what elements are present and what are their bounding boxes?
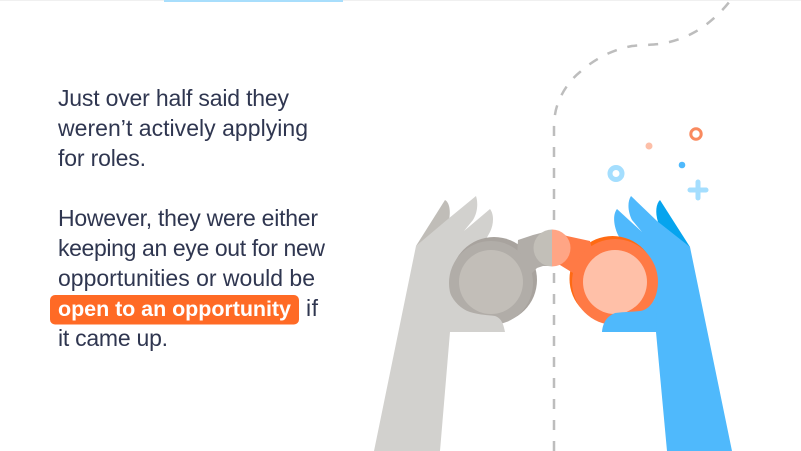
text block: not actively applying: Just over half said they xyxy=(58,85,290,111)
top accent bar xyxy=(164,0,343,2)
illustration: blue hand with binocular half xyxy=(552,196,732,451)
binocular bridge xyxy=(534,230,570,266)
highlighted phrase: open to an opportunity xyxy=(58,297,291,321)
text block: not actively applying: for roles. xyxy=(58,145,146,171)
icon: pink dot xyxy=(646,142,652,150)
icon: blue dot xyxy=(679,162,685,168)
text block: not actively applying xyxy=(57,85,308,171)
text block: open to opportunities: opportunities or would be xyxy=(58,265,315,291)
text block: open to opportunities: if xyxy=(306,295,319,321)
text block: open to opportunities xyxy=(50,205,325,351)
text block: open to opportunities: keeping an eye out for new xyxy=(58,235,325,261)
icon: orange ring xyxy=(691,129,701,139)
text block: open to opportunities: it came up. xyxy=(58,325,168,351)
text block: not actively applying: weren’t actively applying xyxy=(57,115,308,141)
text block: open to opportunities: However, they were either xyxy=(58,205,318,231)
icon: plus xyxy=(690,182,706,198)
dashed path xyxy=(554,1,730,451)
icon: light blue ring xyxy=(610,168,622,180)
illustration: grey hand with binocular half xyxy=(374,196,552,451)
